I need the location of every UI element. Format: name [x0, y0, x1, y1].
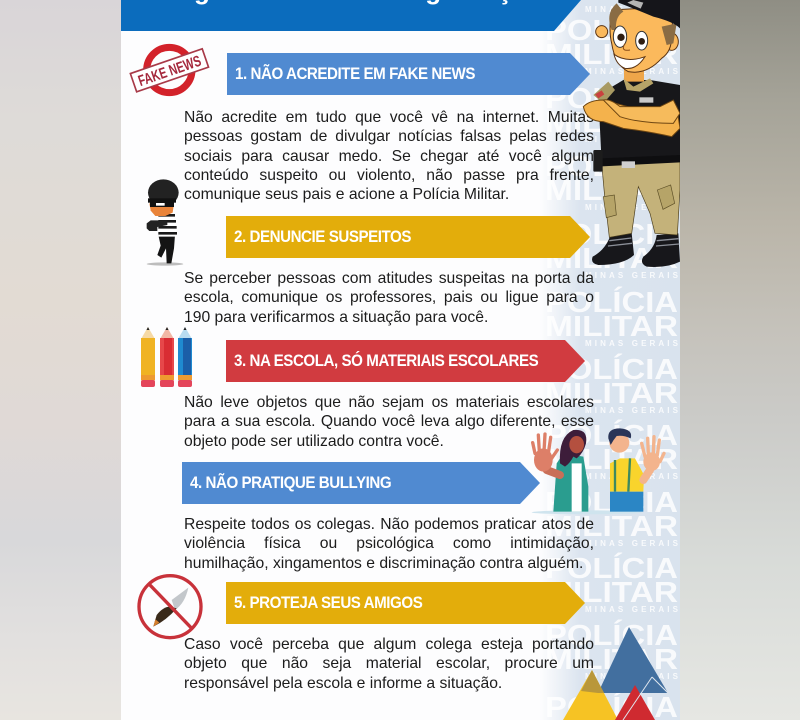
background watermark: Polícia Militar: POLÍCIA [545, 618, 678, 652]
icon: thief [146, 179, 184, 266]
text block 4: humilhação, xingamentos e discriminação contra alguém. [184, 555, 583, 572]
background watermark: Polícia Militar: POLÍCIA [545, 352, 678, 386]
heading banner 4: 4. NÃO PRATIQUE BULLYING [190, 473, 391, 492]
text block 5: objeto que não seja material escolar, procure um [184, 655, 594, 672]
background watermark: Polícia Militar: MINAS GERAIS [585, 203, 679, 212]
text block 3: Não leve objetos que não sejam os materiais escolares [184, 394, 594, 411]
background watermark: Polícia Militar: MINAS GERAIS [585, 472, 679, 481]
background watermark: Polícia Militar: MILITAR [545, 175, 678, 207]
background watermark: Polícia Militar: POLÍCIA [545, 285, 678, 319]
text block 1: conteúdo suspeito ou violento, não passe pra frente, [184, 167, 594, 184]
text block 5: Caso você perceba que algum colega esteja portando [184, 636, 594, 653]
background watermark: Polícia Militar: MINAS GERAIS [585, 5, 679, 14]
icon: children raising hands [531, 428, 666, 514]
heading banner 5: 5. PROTEJA SEUS AMIGOS [234, 593, 422, 612]
text block 3: para a sua escola. Quando você leva algo diferente, esse [184, 413, 594, 430]
icon: police officer mascot [582, 0, 680, 267]
icon: fake news stamp: FAKE NEWS [136, 53, 203, 90]
icon: no knives [137, 574, 203, 640]
background watermark: Polícia Militar: MINAS GERAIS [585, 406, 679, 415]
background watermark: Polícia Militar: POLÍCIA [545, 13, 678, 47]
background watermark: Polícia Militar: POLÍCIA [545, 217, 678, 251]
background watermark: Polícia Militar: MILITAR [545, 311, 678, 343]
text block 1: pessoas gostam de divulgar notícias falsas pelas redes [184, 128, 594, 145]
icon: fake news stamp [129, 44, 210, 96]
text block 1: comunique seus pais e acione a Polícia Militar. [184, 186, 509, 203]
background watermark: Polícia Militar: MILITAR [545, 378, 678, 410]
decorative triangles [563, 627, 668, 720]
text block 5 [184, 636, 594, 692]
background watermark: Polícia Militar: POLÍCIA [545, 418, 678, 452]
background watermark: Polícia Militar: POLÍCIA [545, 81, 678, 115]
background watermark: Polícia Militar: MINAS GERAIS [585, 135, 679, 144]
heading banner 1: 1. NÃO ACREDITE EM FAKE NEWS [235, 64, 475, 83]
text block 4: violência física ou psicológica como intimidação, [184, 535, 594, 552]
background watermark: Polícia Militar: POLÍCIA [545, 485, 678, 519]
text block 1: sociais para causar medo. Se chegar até você algum [184, 148, 594, 165]
icon: pencils [141, 327, 192, 387]
background watermark: Polícia Militar: MILITAR [545, 107, 678, 139]
background watermark: Polícia Militar: MINAS GERAIS [585, 271, 679, 280]
background watermark: Polícia Militar: MINAS GERAIS [585, 339, 679, 348]
background watermark: Polícia Militar: MINAS GERAIS [585, 672, 679, 681]
heading banner 2 [226, 216, 590, 258]
heading banner 3 [226, 340, 585, 382]
panel: infographic page [121, 0, 680, 720]
text block 1: Não acredite em tudo que você vê na internet. Muitas [184, 109, 594, 126]
background watermark: Polícia Militar: POLÍCIA [545, 551, 678, 585]
heading banner 4 [182, 462, 540, 504]
background watermark: Polícia Militar: MILITAR [545, 577, 678, 609]
background watermark: Polícia Militar: MILITAR [545, 243, 678, 275]
background watermark: Polícia Militar: MINAS GERAIS [585, 539, 679, 548]
heading banner 3: 3. NA ESCOLA, SÓ MATERIAIS ESCOLARES [234, 351, 538, 370]
heading banner 5 [226, 582, 585, 624]
text block 4 [184, 516, 594, 572]
heading banner 1 [227, 53, 590, 95]
background watermark: Polícia Militar: POLÍCIA [545, 149, 678, 183]
background watermark: Polícia Militar: MINAS GERAIS [585, 67, 679, 76]
text block 3: objeto pode ser utilizado contra você. [184, 433, 444, 450]
text block 2: escola, comunique os professores, pais ou ligue para o [184, 289, 594, 306]
background watermark: Polícia Militar [545, 5, 679, 720]
text block 2 [184, 270, 594, 326]
text block 2: 190 para verificarmos a situação para você. [184, 309, 488, 326]
text block 4: Respeite todos os colegas. Não podemos praticar atos de [184, 516, 594, 533]
text block 5: responsável pela escola e informe a situação. [184, 675, 502, 692]
background watermark: Polícia Militar: MILITAR [545, 39, 678, 71]
heading banner 2: 2. DENUNCIE SUSPEITOS [234, 227, 411, 246]
background watermark: Polícia Militar: MILITAR [545, 644, 678, 676]
background watermark: Polícia Militar: MILITAR [545, 444, 678, 476]
text block 2: Se perceber pessoas com atitudes suspeitas na porta da [184, 270, 594, 287]
background watermark: Polícia Militar: MILITAR [545, 511, 678, 543]
text block 3 [184, 394, 594, 450]
text block 1 [184, 109, 594, 203]
background watermark: Polícia Militar: MINAS GERAIS [585, 605, 679, 614]
title banner (cropped) [121, 0, 581, 31]
